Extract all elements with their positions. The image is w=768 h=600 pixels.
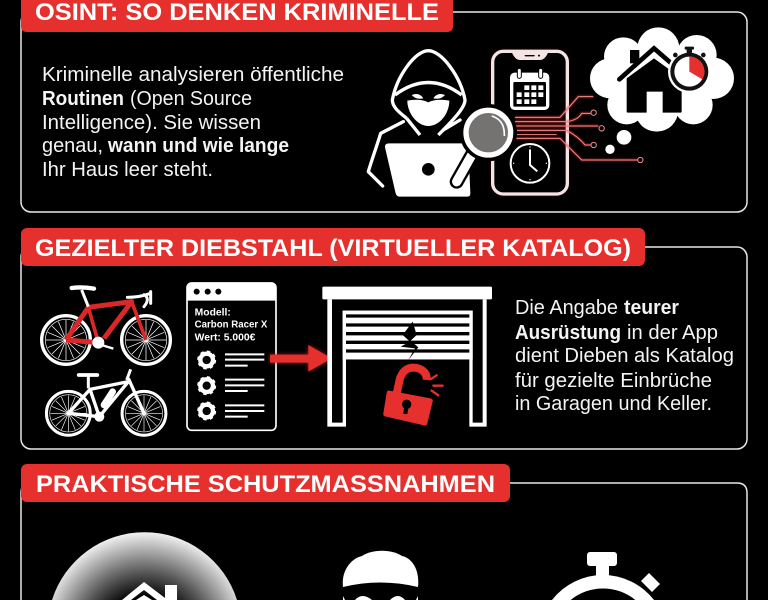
icon: masked head: [343, 551, 418, 600]
icon: clock: [511, 144, 549, 183]
text: Diebstahl description: dient Dieben als Katalog: [515, 345, 734, 367]
heading: Diebstahl: GEZIELTER DIEBSTAHL (VIRTUELLER KATALOG): [35, 235, 631, 262]
circuit lines: [515, 97, 643, 163]
icon: broken red padlock: [383, 368, 443, 425]
icon: garage: [322, 287, 492, 427]
text: Diebstahl description: in der App: [627, 322, 718, 344]
icon: stopwatch: [668, 47, 711, 93]
illustration: Diebstahl scene: [42, 283, 492, 435]
heading: Schutzmassnahmen: PRAKTISCHE SCHUTZMASSNAHMEN: [36, 471, 495, 498]
text: OSINT description: Ihr Haus leer steht.: [42, 159, 213, 181]
icon: calendar: [510, 68, 549, 110]
illustration: OSINT scene: [368, 27, 734, 197]
icon: stopwatch: [552, 552, 660, 600]
heading: Schutzmassnahmen: [21, 464, 510, 502]
text: Diebstahl description: für gezielte Einbrüche: [515, 370, 712, 392]
text: Diebstahl description: in Garagen und Keller.: [515, 393, 712, 415]
icon: app window: [187, 283, 276, 430]
text: OSINT description: Kriminelle analysieren öffentliche: [42, 64, 344, 86]
heading: Diebstahl: [21, 228, 645, 266]
text: OSINT description: wann und wie lange: [107, 135, 289, 157]
icon: house with halo: [52, 532, 237, 600]
arrow: red to garage: [270, 345, 332, 372]
text: Diebstahl description: Die Angabe: [515, 297, 618, 319]
icon: white e-bike: [46, 369, 166, 435]
text: app data: Carbon Racer X: [195, 320, 267, 331]
text: OSINT description: Routinen: [42, 88, 124, 110]
icon: magnifier: [457, 104, 517, 182]
icon: phone: [493, 51, 567, 194]
icon: house: [619, 48, 687, 113]
text: OSINT description: genau,: [42, 135, 103, 157]
panel: OSINT: [21, 0, 747, 212]
icon: thought bubble: [590, 27, 734, 154]
text: OSINT description: [42, 64, 344, 181]
text: Diebstahl description: teurer: [624, 297, 679, 319]
panel: Diebstahl: [21, 228, 747, 449]
panel: Schutzmassnahmen: [21, 464, 747, 600]
text: Diebstahl description: Ausrüstung: [515, 322, 621, 344]
text: OSINT description: (Open Source: [130, 88, 252, 110]
text: app data: Modell:: [195, 308, 231, 319]
text: app data: Wert: 5.000€: [195, 332, 256, 343]
text: OSINT description: Intelligence). Sie wissen: [42, 112, 261, 134]
icon: red racing bike: [42, 287, 170, 364]
icon: hacker: [368, 51, 470, 197]
text: Diebstahl description: [515, 297, 734, 415]
